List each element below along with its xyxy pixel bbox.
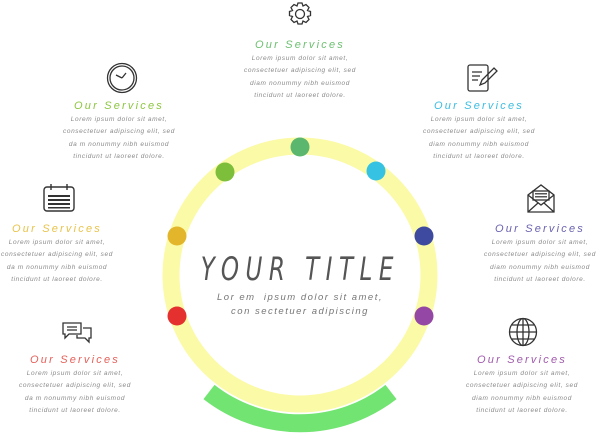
subtitle: con sectetuer adipiscing [231, 306, 369, 317]
block: envelope services: Our Services [495, 223, 585, 235]
icon: clock [106, 62, 138, 94]
block: envelope services: Lorem ipsum dolor sit amet, [492, 239, 588, 246]
block: chat services [19, 354, 131, 414]
icon: chat [62, 322, 92, 344]
block: edit services: Our Services [434, 100, 524, 112]
icon: envelope [527, 184, 555, 213]
block: calendar services [1, 223, 113, 283]
icon: globe [508, 318, 538, 346]
block: edit services: consectetuer adipiscing elit, sed [423, 128, 535, 135]
block: globe services: Lorem ipsum dolor sit amet, [474, 370, 570, 377]
block: edit services: diam nonummy nibh euismod [429, 141, 529, 148]
block: chat services: consectetuer adipiscing elit, sed [19, 382, 131, 389]
block: clock services: Our Services [74, 100, 164, 112]
block: globe services: diam nonummy nibh euismod [472, 395, 572, 402]
block: calendar services: Lorem ipsum dolor sit amet, [9, 239, 105, 246]
subtitle: Lor em ipsum dolor sit amet, [217, 292, 383, 303]
block: clock services: da m nonummy nibh euismod [69, 141, 169, 148]
icon: gear [288, 2, 312, 25]
block: envelope services [484, 223, 596, 283]
block: edit services: tincidunt ut laoreet dolore. [433, 153, 525, 160]
block: top services: tincidunt ut laoreet dolore. [254, 92, 346, 99]
subtitle [217, 292, 383, 317]
block: envelope services: diam nonummy nibh euismod [490, 264, 590, 271]
block: calendar services: consectetuer adipiscing elit, sed [1, 251, 113, 258]
block: chat services: da m nonummy nibh euismod [25, 395, 125, 402]
block: top services: diam nonummy nibh euismod [250, 80, 350, 87]
block: globe services [466, 354, 578, 414]
title: YOUR TITLE [200, 250, 400, 288]
block: top services [244, 39, 356, 99]
block: top services: consectetuer adipiscing elit, sed [244, 67, 356, 74]
block: chat services: Lorem ipsum dolor sit amet, [27, 370, 123, 377]
block: chat services: tincidunt ut laoreet dolore. [29, 407, 121, 414]
block: calendar services: tincidunt ut laoreet dolore. [11, 276, 103, 283]
block: globe services: consectetuer adipiscing elit, sed [466, 382, 578, 389]
icon: calendar [43, 184, 75, 212]
block: chat services: Our Services [30, 354, 120, 366]
block: top services: Our Services [255, 39, 345, 51]
block: edit services [423, 100, 535, 160]
block: envelope services: consectetuer adipiscing elit, sed [484, 251, 596, 258]
block: globe services: tincidunt ut laoreet dolore. [476, 407, 568, 414]
icon: edit [467, 64, 498, 92]
block: edit services: Lorem ipsum dolor sit amet, [431, 116, 527, 123]
block: top services: Lorem ipsum dolor sit amet, [252, 55, 348, 62]
green base arc [209, 392, 391, 423]
block: clock services [63, 100, 175, 160]
block: envelope services: tincidunt ut laoreet dolore. [494, 276, 586, 283]
block: calendar services: da m nonummy nibh euismod [7, 264, 107, 271]
block: calendar services: Our Services [12, 223, 102, 235]
dots [168, 138, 434, 326]
block: clock services: Lorem ipsum dolor sit amet, [71, 116, 167, 123]
block: globe services: Our Services [477, 354, 567, 366]
block: clock services: consectetuer adipiscing elit, sed [63, 128, 175, 135]
block: clock services: tincidunt ut laoreet dolore. [73, 153, 165, 160]
yellow ring [171, 146, 429, 404]
